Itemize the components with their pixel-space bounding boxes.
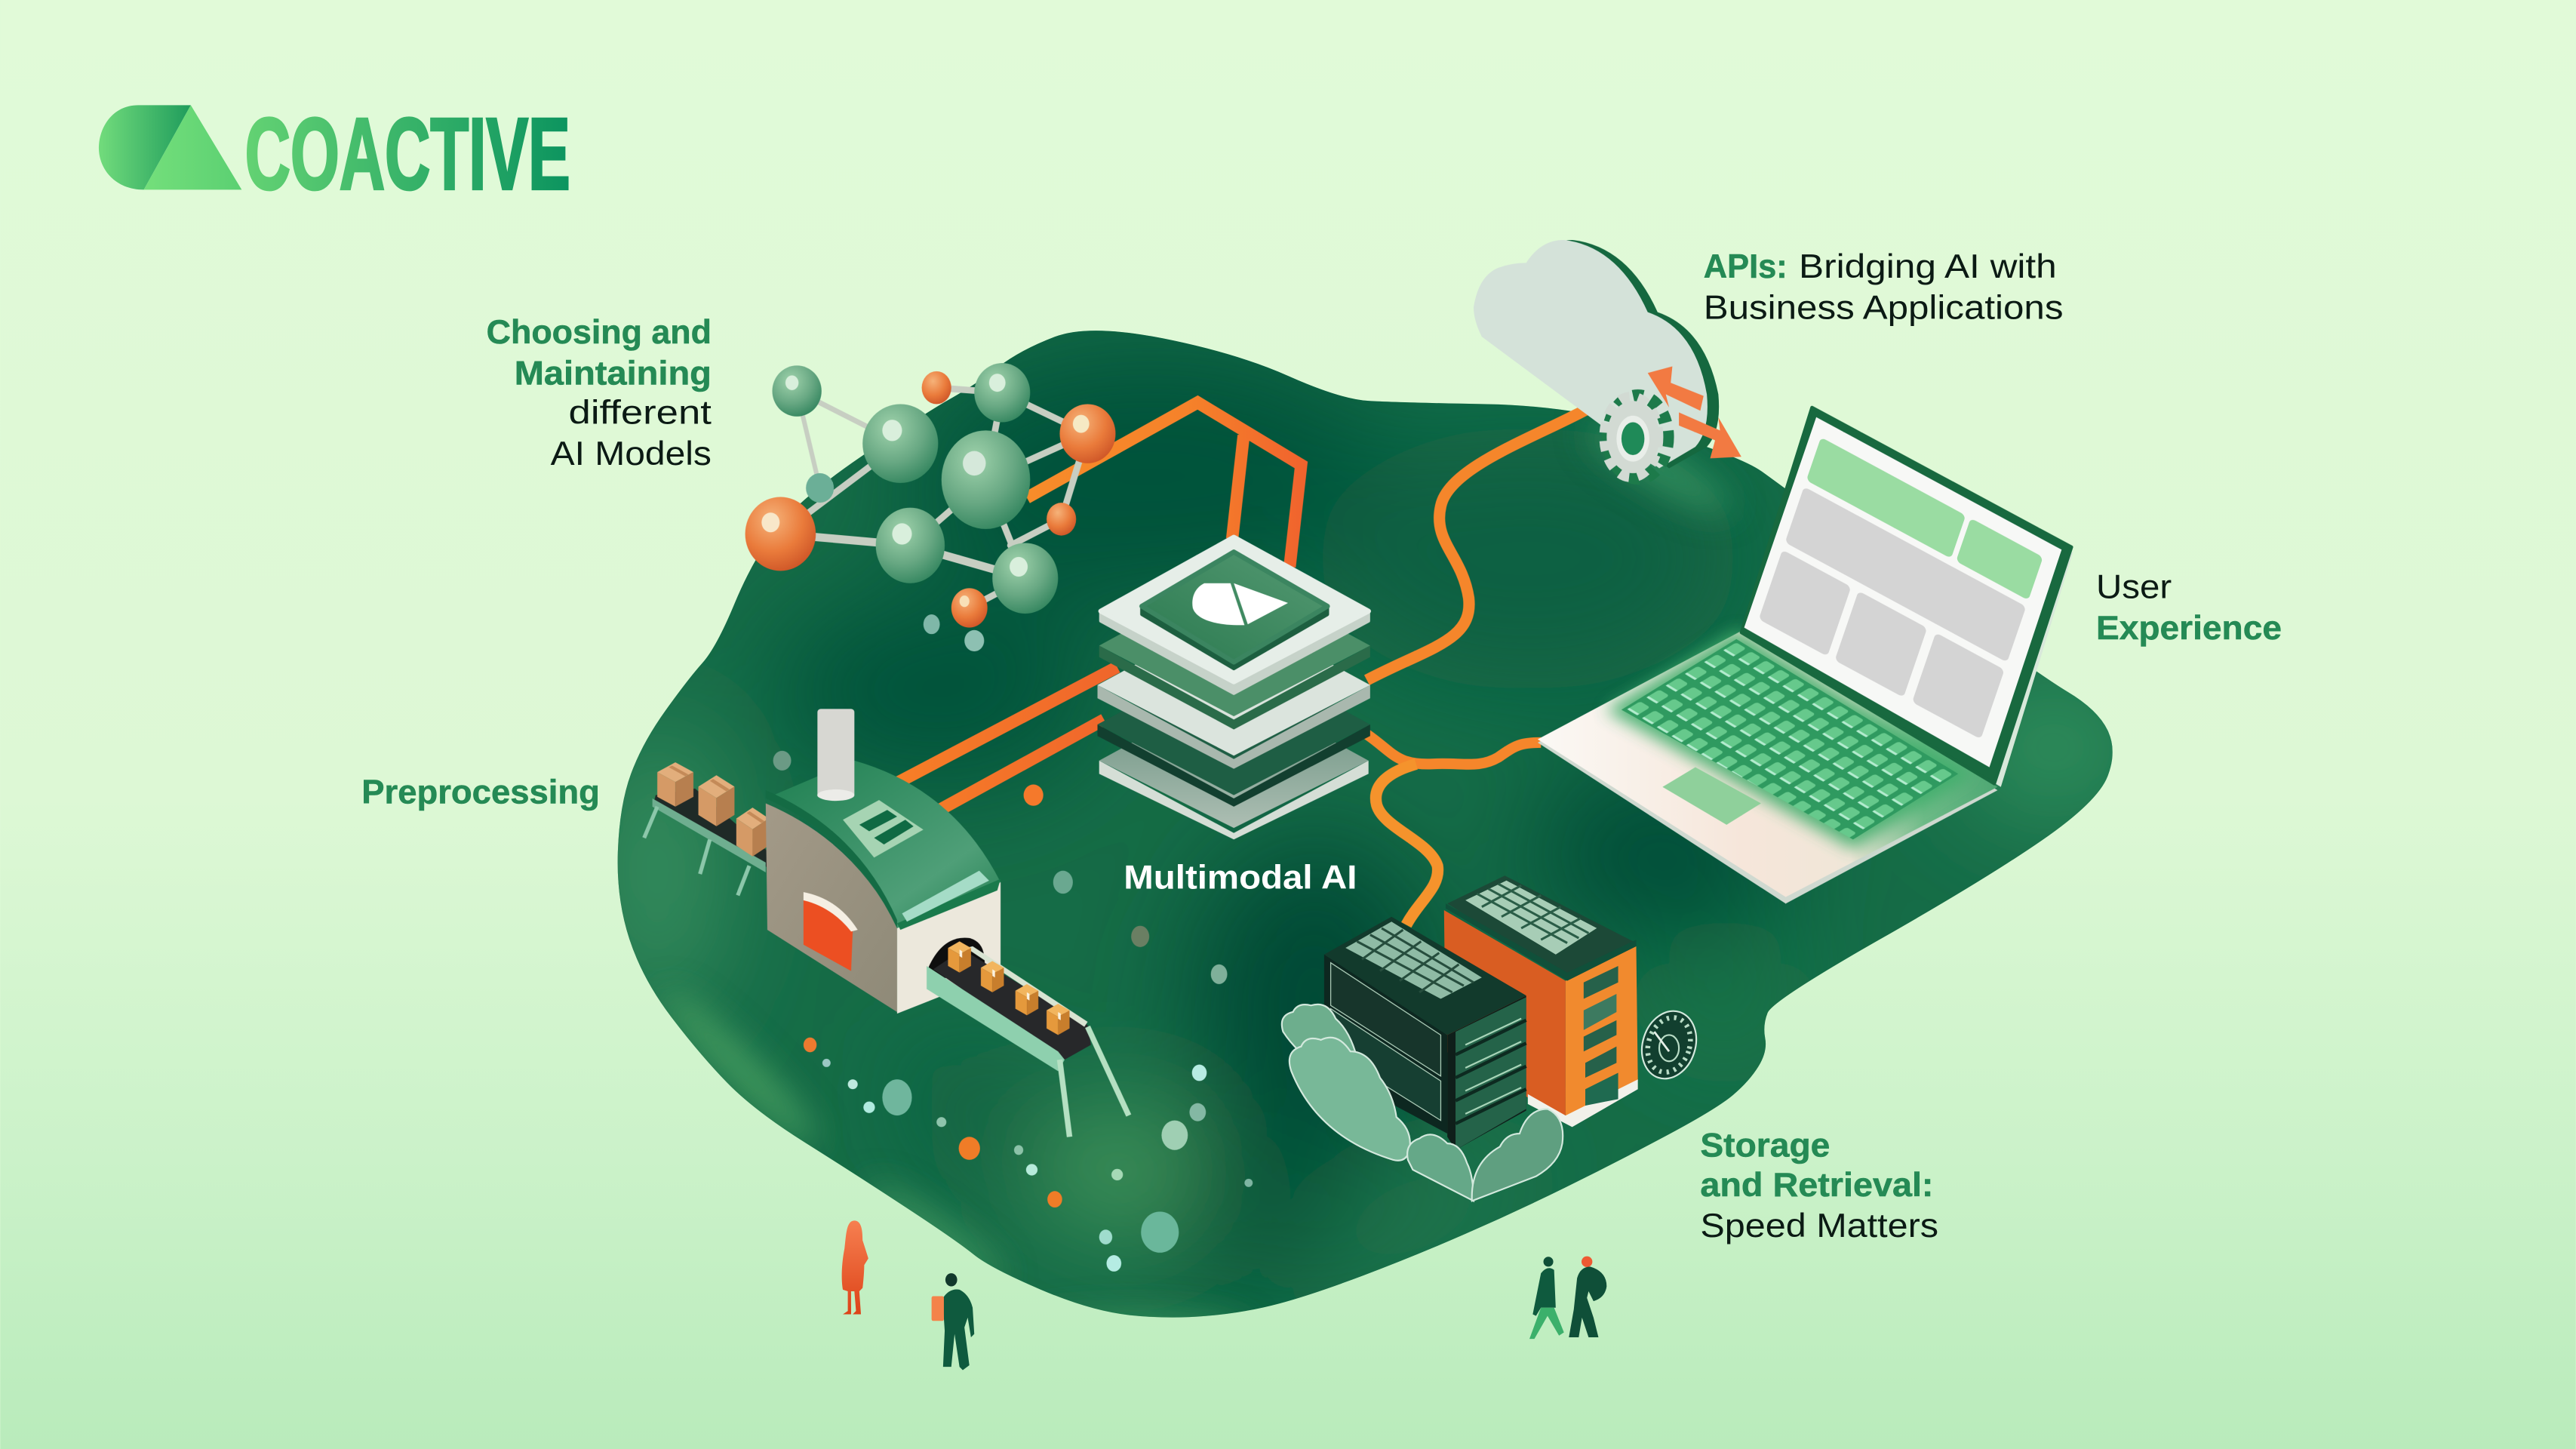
chip stack: multimodal AI (1097, 537, 1370, 839)
stack layer 1 (1101, 537, 1369, 694)
line: stack to laptop (1366, 734, 1541, 764)
clouds around server (1282, 1004, 1563, 1201)
laptop screen (1741, 408, 2073, 787)
laptop: user experience (1538, 408, 2073, 903)
label: APIs (1704, 248, 2063, 326)
label: storage and retrieval (1700, 1128, 1938, 1244)
people: two walking (1529, 1257, 1606, 1339)
line: stack to factory upper (899, 667, 1117, 782)
line: models to stack (1027, 402, 1301, 567)
logo: Coactive (99, 97, 570, 211)
icon: gear (1605, 396, 1668, 478)
keyboard (1622, 639, 1958, 839)
label: user experience: Experience (2096, 610, 2282, 647)
logo: Coactive: COACTIVE (245, 97, 570, 211)
stack layer 2 (1099, 572, 1370, 730)
stack layer 3 (1097, 611, 1370, 769)
green island background (617, 331, 2113, 1318)
storage: building and server (1282, 875, 1705, 1201)
stack chip (1142, 552, 1327, 669)
label: APIs: Business Applications (1704, 289, 2063, 326)
line: stack to API (1366, 408, 1591, 680)
label: storage and retrieval: and Retrieval: (1700, 1167, 1934, 1204)
label: choosing and maintaining AI models: Maintaining (515, 355, 712, 392)
person: man with orange bag (932, 1273, 974, 1371)
circuit lines (899, 402, 1591, 925)
input conveyor (644, 762, 769, 895)
laptop base (1538, 631, 1997, 903)
factory walls (766, 803, 1001, 1014)
person: woman in orange (842, 1220, 868, 1314)
label: multimodal AI: Multimodal AI (1124, 860, 1357, 897)
roof vent (843, 800, 924, 857)
label: storage and retrieval: Speed Matters (1700, 1208, 1938, 1244)
factory roof (766, 761, 1001, 930)
label: APIs: Bridging AI with (1799, 248, 2057, 285)
server (1324, 917, 1526, 1150)
stack layer 4 (1097, 651, 1370, 807)
cloud: APIs (1474, 240, 1741, 478)
label: preprocessing: Preprocessing (361, 774, 600, 811)
molecule: AI models (745, 363, 1115, 628)
stack layer 5 (1099, 687, 1369, 839)
label: choosing and maintaining AI models (487, 314, 712, 472)
building (1444, 875, 1638, 1127)
output conveyor (927, 938, 1129, 1137)
label: user experience (2096, 568, 2282, 647)
label: choosing and maintaining AI models: AI Models (551, 435, 712, 472)
factory: preprocessing (644, 709, 1129, 1137)
label: user experience: User (2096, 568, 2172, 605)
icon: speed gauge (1634, 1004, 1705, 1086)
label: choosing and maintaining AI models: Choosing and (487, 314, 712, 351)
stack logo mark (1192, 583, 1288, 625)
label: choosing and maintaining AI models: different (569, 395, 712, 432)
label: APIs: APIs: (1704, 248, 1788, 285)
floating dots (773, 614, 1253, 1272)
icon: arrow up-left (1648, 366, 1704, 411)
line: stack to factory lower (936, 719, 1104, 811)
icon: arrow down-right (1679, 412, 1741, 458)
furnace door (804, 892, 858, 971)
trackpad (1662, 768, 1761, 825)
line: stack to storage (1376, 764, 1438, 925)
label: storage and retrieval: Storage (1700, 1128, 1830, 1164)
chimney (817, 709, 854, 801)
chimney base (817, 761, 854, 801)
